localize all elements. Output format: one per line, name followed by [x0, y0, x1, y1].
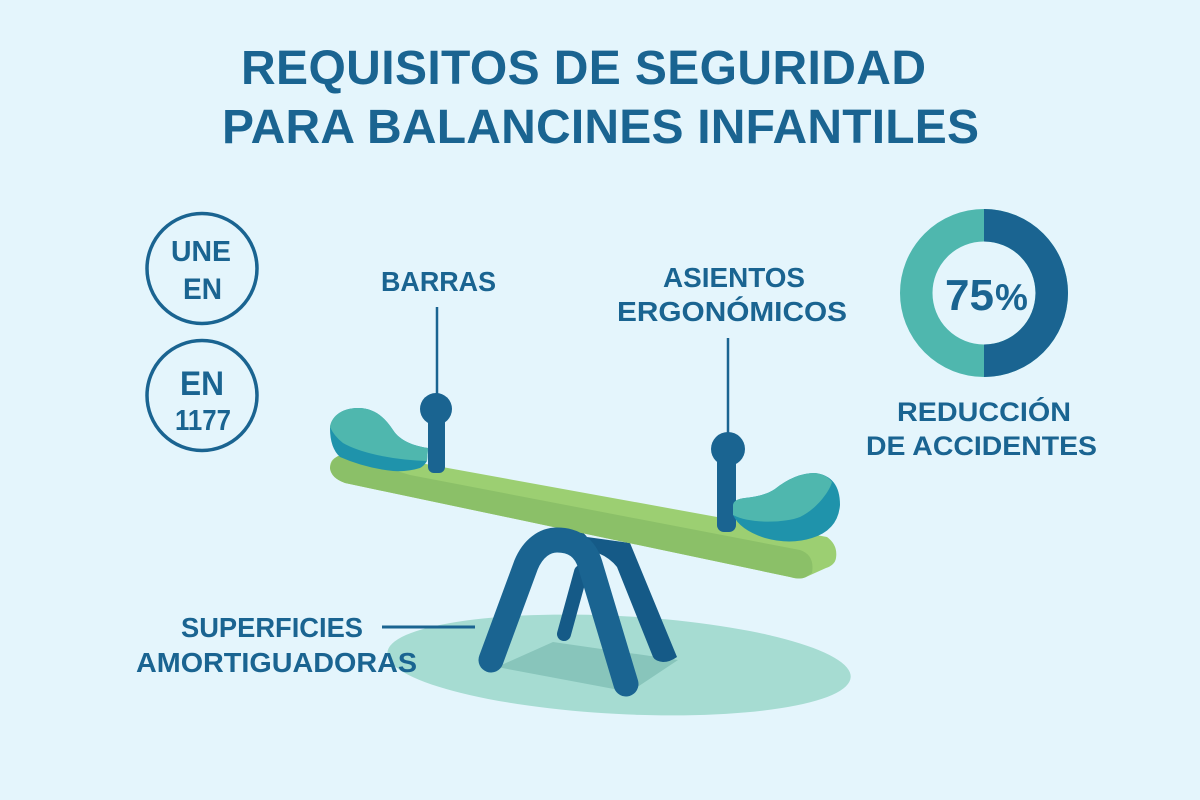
badge: UNE EN — [147, 214, 257, 324]
title — [222, 42, 979, 154]
title: PARA BALANCINES INFANTILES — [222, 101, 979, 154]
label: superficies amortiguadoras — [136, 612, 417, 678]
label: asientos ergonómicos: ERGONÓMICOS — [617, 296, 847, 327]
donut chart: 75%: % — [995, 277, 1028, 318]
badge: EN 1177: EN — [180, 365, 224, 403]
left handle bar — [420, 393, 452, 473]
leader line: asientos — [727, 338, 729, 435]
leader line: superficies — [382, 626, 475, 628]
front arch leg — [491, 540, 626, 684]
donut chart: 75%: 75 — [945, 271, 994, 320]
caption: reducción de accidentes: REDUCCIÓN — [897, 396, 1071, 427]
badge: UNE EN: UNE — [171, 236, 231, 268]
label: superficies amortiguadoras: SUPERFICIES — [181, 612, 363, 643]
seesaw illustration — [330, 393, 853, 726]
right seat — [733, 473, 840, 542]
donut chart: 75% — [916, 209, 1068, 377]
caption: reducción de accidentes: DE ACCIDENTES — [866, 431, 1097, 461]
caption: reducción de accidentes — [866, 396, 1097, 461]
plank — [330, 452, 836, 578]
title: REQUISITOS DE SEGURIDAD — [241, 42, 926, 95]
leader line: barras — [436, 307, 438, 400]
label: barras: BARRAS — [381, 266, 496, 297]
right handle bar — [711, 432, 745, 532]
back legs — [564, 526, 677, 662]
badge: UNE EN: EN — [183, 273, 222, 306]
badge: EN 1177 — [147, 340, 257, 450]
label: superficies amortiguadoras: AMORTIGUADORAS — [136, 647, 417, 678]
left seat — [330, 408, 428, 471]
badge: EN 1177: 1177 — [175, 405, 231, 437]
label: asientos ergonómicos: ASIENTOS — [663, 262, 805, 293]
label: asientos ergonómicos — [617, 262, 847, 327]
ground: cushioning surface — [385, 604, 853, 726]
